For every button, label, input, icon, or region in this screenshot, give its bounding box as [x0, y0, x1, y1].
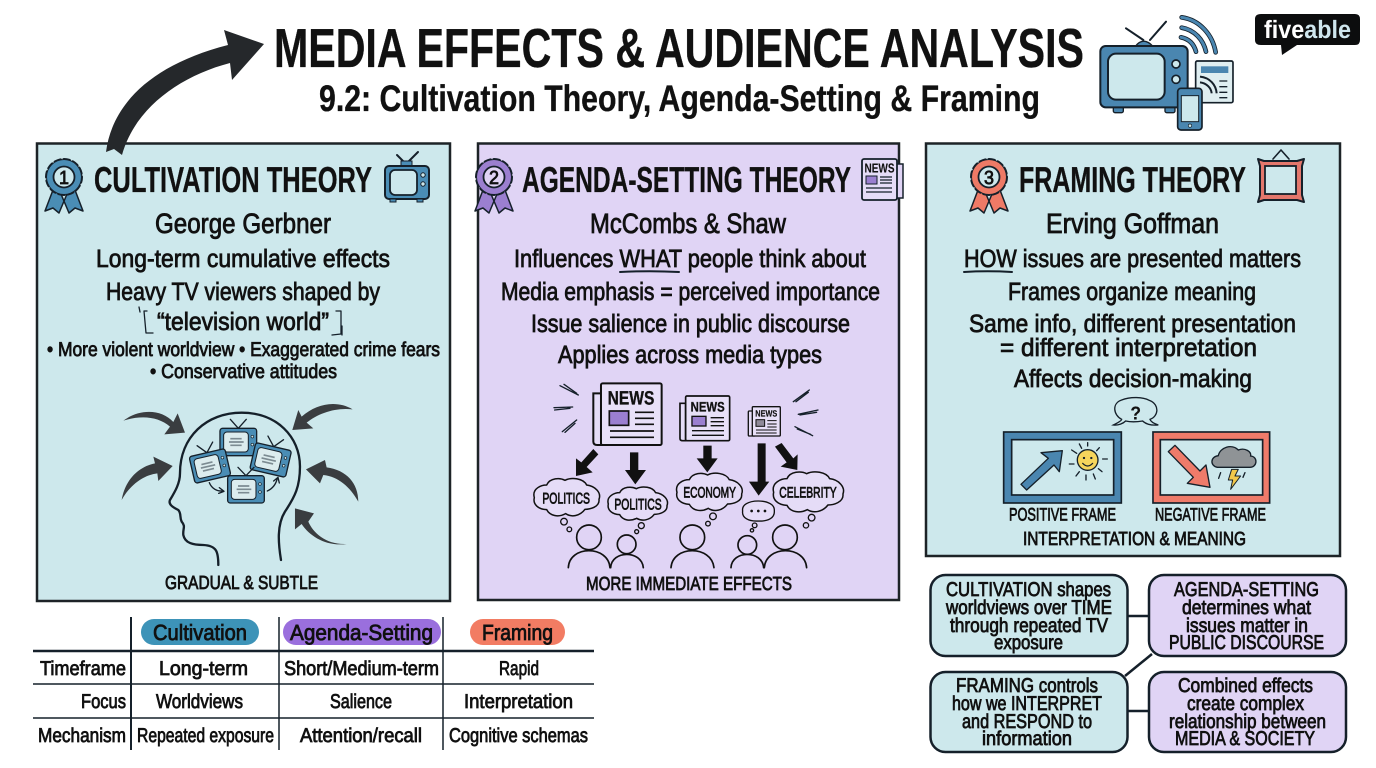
text: television world: “television world” — [157, 308, 329, 336]
author: George Gerbner: George Gerbner — [155, 208, 331, 239]
tv top — [220, 419, 257, 456]
icon: picture frame — [1258, 150, 1304, 202]
text: frames organize meaning: Frames organize meaning — [1008, 278, 1256, 306]
row: focus: Worldviews — [156, 691, 243, 713]
title: MEDIA EFFECTS & AUDIENCE ANALYSIS — [274, 17, 1084, 79]
text: heavy TV viewers: Heavy TV viewers shaped by — [106, 278, 380, 306]
icon: small television — [385, 152, 429, 202]
summary box: agenda-setting: determines what — [1182, 597, 1311, 619]
summary box: agenda-setting: PUBLIC DISCOURSE — [1169, 632, 1324, 654]
label: positive frame: POSITIVE FRAME — [1009, 504, 1116, 524]
text: applies across media: Applies across media types — [558, 341, 822, 369]
summary box: agenda-setting — [1149, 575, 1346, 656]
icon: header television and devices — [1100, 17, 1233, 130]
newspaper large — [593, 383, 662, 445]
text: long-term effects: Long-term cumulative effects — [96, 245, 390, 273]
newspaper small: NEWS — [755, 409, 777, 419]
icon: ribbon 1: 1 — [59, 168, 69, 189]
summary box: combined effects: relationship between — [1169, 711, 1326, 733]
summary box: cultivation: through repeated TV — [950, 615, 1109, 637]
thought cloud: politics 2 — [608, 487, 667, 520]
row: mechanism: Attention/recall — [300, 725, 422, 747]
icon: ribbon 1 — [45, 160, 83, 213]
row: focus: Focus — [81, 691, 126, 713]
text: conservative attitudes: • Conservative attitudes — [150, 361, 337, 383]
caption: interpretation and meaning: INTERPRETATION & MEANING — [1023, 529, 1246, 550]
heading: framing theory: FRAMING THEORY — [1019, 159, 1246, 200]
thought cloud: dots — [743, 501, 774, 521]
text: how issues are presented: HOW issues are presented matters — [964, 245, 1301, 273]
heading: agenda-setting theory: AGENDA-SETTING THEORY — [522, 159, 851, 200]
row: focus — [81, 691, 573, 713]
summary box: agenda-setting: AGENDA-SETTING — [1174, 579, 1319, 601]
pill: cultivation: Cultivation — [153, 620, 247, 645]
summary box: combined effects: create complex — [1187, 693, 1304, 715]
thought cloud: economy — [677, 473, 742, 510]
speech bubble with question mark — [1113, 398, 1158, 425]
text: influences what people think about: Influences WHAT people think about — [514, 245, 866, 273]
thought cloud: politics 1 — [534, 479, 600, 516]
tv bottom — [228, 467, 264, 503]
text: bullet effects: • More violent worldview • Exaggerated crime fears — [47, 339, 440, 361]
row: focus: Salience — [330, 691, 392, 713]
swoosh arrows — [122, 404, 358, 544]
text: affects decision-making: Affects decision-making — [1014, 365, 1252, 393]
row: timeframe: Short/Medium-term — [284, 658, 439, 680]
icon: ribbon 3: 3 — [984, 168, 994, 189]
head outline — [170, 413, 300, 565]
illustration: head with televisions — [122, 404, 358, 565]
author: Erving Goffman: Erving Goffman — [1046, 208, 1219, 239]
icon: ribbon 2 — [475, 160, 513, 213]
logo: fiveable: fiveable — [1264, 16, 1351, 44]
panel: cultivation theory — [37, 144, 450, 601]
summary box: combined effects — [1149, 672, 1346, 752]
summary box: framing: and RESPOND to — [962, 711, 1092, 733]
summary box: combined effects: MEDIA & SOCIETY — [1175, 728, 1315, 750]
illustration: positive and negative frames — [1004, 398, 1270, 524]
row: timeframe: Timeframe — [40, 658, 126, 680]
row: focus: Interpretation — [464, 691, 573, 713]
caption: more immediate effects: MORE IMMEDIATE EFFECTS — [586, 574, 792, 595]
positive frame — [1004, 432, 1121, 503]
illustration: news to public agenda — [534, 383, 844, 568]
row: mechanism: Cognitive schemas — [449, 725, 588, 747]
author: McCombs and Shaw: McCombs & Shaw — [590, 208, 787, 239]
row: mechanism: Repeated exposure — [137, 725, 274, 747]
thought cloud: celebrity — [773, 472, 844, 512]
speech bubble with question mark: ? — [1130, 402, 1141, 423]
pill: framing: Framing — [482, 620, 553, 645]
icon: small newspaper — [862, 159, 903, 200]
summary box: cultivation: exposure — [994, 632, 1063, 654]
icon: ribbon 3 — [970, 160, 1008, 213]
icon: small newspaper: NEWS — [864, 160, 895, 176]
small cycle arrows — [209, 477, 279, 493]
newspaper small — [748, 407, 780, 436]
row: mechanism — [38, 725, 588, 747]
text: media emphasis: Media emphasis = perceived importance — [501, 278, 880, 306]
summary box: cultivation: CULTIVATION shapes — [946, 579, 1111, 601]
summary box: combined effects: Combined effects — [1178, 675, 1313, 697]
heading: cultivation theory: CULTIVATION THEORY — [94, 159, 372, 200]
icon: ribbon 2: 2 — [489, 168, 499, 189]
label: negative frame: NEGATIVE FRAME — [1155, 504, 1266, 524]
burst lines — [554, 384, 818, 436]
black arrows — [576, 443, 798, 496]
summary box: cultivation — [930, 575, 1128, 656]
summary box: framing: how we INTERPRET — [952, 693, 1102, 715]
text: different interpretation: = different interpretation — [1000, 334, 1257, 362]
caption: gradual and subtle: GRADUAL & SUBTLE — [165, 573, 318, 594]
summary box: framing — [930, 672, 1128, 752]
newspaper large: NEWS — [608, 387, 654, 409]
table grid — [33, 617, 594, 750]
tv left — [187, 440, 231, 483]
thought cloud: economy: ECONOMY — [683, 484, 736, 501]
logo: fiveable — [1255, 14, 1360, 55]
thought cloud: politics 2: POLITICS — [614, 495, 662, 513]
panel: framing theory — [926, 144, 1340, 556]
text: same info different presentation: Same info, different presentation — [969, 310, 1296, 338]
thought cloud: politics 1: POLITICS — [542, 489, 590, 507]
summary box: cultivation: worldviews over TIME — [945, 597, 1112, 619]
newspaper medium: NEWS — [691, 399, 725, 415]
text: issue salience: Issue salience in public discourse — [531, 310, 850, 338]
row: mechanism: Mechanism — [38, 725, 126, 747]
thought bubbles — [561, 513, 815, 534]
panel: agenda-setting theory — [475, 144, 903, 600]
pill: agenda-setting: Agenda-Setting — [290, 620, 433, 645]
summary box: framing: FRAMING controls — [956, 675, 1098, 697]
connector lines — [1125, 616, 1152, 711]
thought cloud: celebrity: CELEBRITY — [779, 484, 837, 501]
row: timeframe — [40, 658, 539, 680]
summary box: framing: information — [982, 728, 1072, 750]
row: timeframe: Rapid — [499, 658, 539, 680]
row: timeframe: Long-term — [159, 658, 248, 680]
comparison table — [33, 617, 594, 750]
arrow: large curved arrow to title — [106, 30, 264, 155]
newspaper medium — [680, 396, 730, 441]
subtitle: 9.2: Cultivation Theory, Agenda-Setting & Framing — [319, 78, 1040, 119]
negative frame — [1153, 432, 1270, 503]
tv right — [250, 434, 294, 477]
summary box: agenda-setting: issues matter in — [1186, 615, 1308, 637]
audience people — [568, 525, 807, 568]
